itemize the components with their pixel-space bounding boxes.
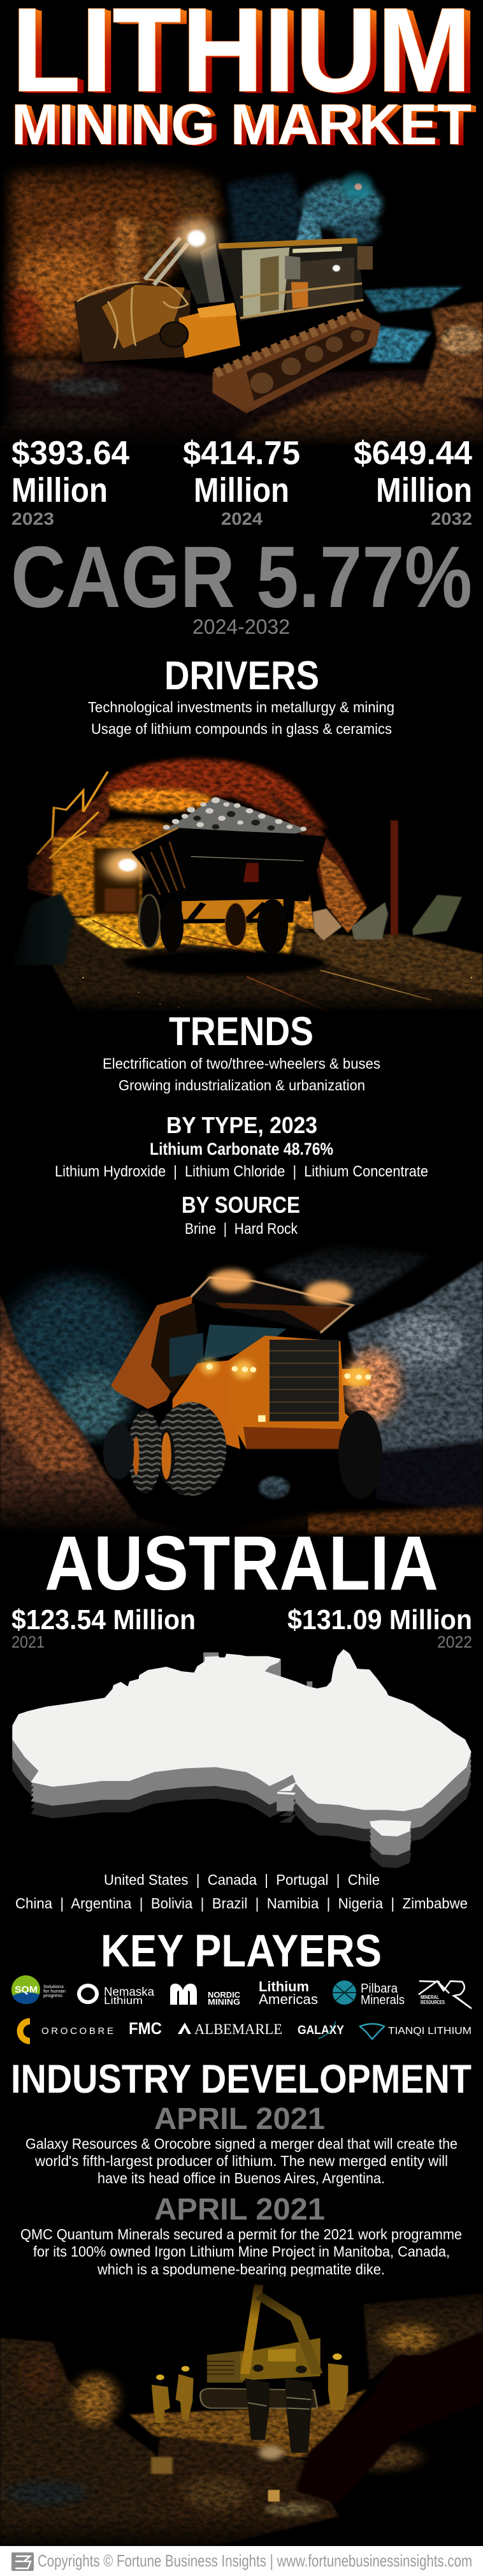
logo: Mineral Resources: MINERAL (421, 1994, 439, 2000)
logo: Lithium Americas: Americas (259, 1991, 318, 2007)
development 1: Galaxy Resources & Orocobre signed a merger deal that will create the (25, 2135, 458, 2152)
development 1: APRIL 2021 (154, 2102, 325, 2136)
logo: SQM: SQM (15, 1984, 38, 1995)
logo: SQM (11, 1975, 66, 2004)
logo: Orocobre (14, 2021, 113, 2041)
stat: 2024 market size: $414.75 (183, 435, 300, 472)
footer (0, 2546, 483, 2576)
segment: by type: BY TYPE, 2023 (166, 1112, 317, 1138)
logo: Pilbara Minerals (333, 1980, 405, 2007)
logo: FMC: FMC (129, 2019, 162, 2038)
logo: SQM: for human (43, 1988, 66, 1994)
development 1: world's fifth-largest producer of lithium. The new merged entity will (34, 2153, 448, 2169)
logo: SQM: progress (43, 1993, 62, 1998)
country list: China | Argentina | Bolivia | Brazil | Namibia | Nigeria | Zimbabwe (15, 1895, 468, 1912)
regional value 2022: $131.09 Million (287, 1604, 472, 1636)
title: MINING MARKET (11, 93, 472, 157)
logo: Nemaska Lithium: Lithium (104, 1994, 143, 2007)
development 2: which is a spodumene-bearing pegmatite dike. (97, 2261, 385, 2278)
title: MINING MARKET (14, 94, 474, 157)
stat: 2032 market size (354, 435, 472, 529)
logo: Mineral Resources (419, 1981, 472, 2009)
logo: Lithium Americas (259, 1979, 318, 2007)
development 2: for its 100% owned Irgon Lithium Mine Project in Manitoba, Canada, (33, 2243, 450, 2260)
logo: SQM: Solutions (43, 1984, 64, 1989)
logo: Nordic Mining: NORDIC (208, 1990, 241, 2000)
heading: key players: KEY PLAYERS (101, 1926, 382, 1977)
stat: 2023 market size: $393.64 (11, 435, 129, 472)
logo: Pilbara Minerals: Pilbara (361, 1982, 398, 1996)
regional value 2021: 2021 (11, 1632, 45, 1651)
logo: Pilbara Minerals: Minerals (361, 1993, 405, 2007)
logo: Lithium Americas: Lithium (259, 1979, 309, 1994)
trends list: Growing industrialization & urbanization (119, 1077, 365, 1094)
drivers list (88, 699, 394, 737)
country list: United States | Canada | Portugal | Chile (104, 1871, 380, 1888)
heading: trends: TRENDS (169, 1009, 314, 1054)
regional value 2022 (287, 1604, 472, 1651)
regional value 2021 (11, 1604, 196, 1651)
stat: 2023 market size (11, 435, 129, 529)
logo: Galaxy: GALAXY (298, 2024, 344, 2037)
footer logo (11, 2552, 34, 2571)
drivers list: Usage of lithium compounds in glass & ceramics (91, 721, 392, 737)
heading: drivers: DRIVERS (164, 654, 319, 698)
logo: Tianqi Lithium (360, 2024, 472, 2039)
logo: Nordic Mining: MINING (208, 1997, 240, 2007)
logo: Tianqi Lithium: TIANQI LITHIUM (388, 2026, 472, 2037)
stat: 2024 market size: Million (194, 471, 289, 509)
photo: mine cart in tunnel (0, 752, 483, 1014)
development 2: QMC Quantum Minerals secured a permit for the 2021 work programme (20, 2226, 462, 2243)
regional value 2021: $123.54 Million (11, 1604, 196, 1636)
photo: mining drill rig in cave (0, 149, 483, 451)
development 2: APRIL 2021 (154, 2193, 325, 2227)
segment: by type (55, 1112, 428, 1180)
development 2 (20, 2193, 462, 2278)
logo: Nemaska Lithium: Nemaska (104, 1986, 154, 1999)
regional value 2022: 2022 (437, 1632, 472, 1651)
drivers list: Technological investments in metallurgy & mining (88, 699, 394, 715)
stat: 2023 market size: Million (11, 471, 108, 509)
segment: by source: BY SOURCE (182, 1192, 300, 1218)
logo: Nordic Mining (170, 1984, 241, 2007)
logo: Albemarle: ALBEMARLE (194, 2021, 282, 2037)
development 1 (25, 2102, 458, 2186)
photo: haul truck in mine (0, 1239, 483, 1535)
stat: 2023 market size: 2023 (11, 509, 54, 529)
stat: 2024 market size (183, 435, 300, 529)
photo: workers and excavator (0, 2276, 483, 2546)
title: MINING MARKET (17, 94, 477, 158)
segment: by type: Lithium Hydroxide | Lithium Chloride | Lithium Concentrate (55, 1163, 428, 1180)
logo: Nemaska Lithium (79, 1986, 154, 2007)
segment: by source: Brine | Hard Rock (185, 1220, 298, 1238)
segment: by type: Lithium Carbonate 48.76% (150, 1139, 333, 1159)
stat: 2032 market size: 2032 (431, 509, 472, 529)
development 1: have its head office in Buenos Aires, Argentina. (97, 2170, 385, 2186)
stat: 2032 market size: Million (376, 471, 472, 509)
logo: Mineral Resources: RESOURCES (421, 2000, 445, 2005)
segment: by source (182, 1192, 300, 1238)
map: Australia 3D (12, 1649, 472, 1868)
logo: Orocobre: OROCOBRE (41, 2026, 113, 2037)
country list (15, 1871, 468, 1912)
heading: Australia: AUSTRALIA (45, 1519, 438, 1606)
stat: 2032 market size: $649.44 (354, 435, 472, 472)
trends list (103, 1055, 380, 1094)
trends list: Electrification of two/three-wheelers & buses (103, 1055, 380, 1072)
CAGR period: 2024-2032 (192, 615, 290, 638)
stat: 2024 market size: 2024 (221, 509, 263, 529)
